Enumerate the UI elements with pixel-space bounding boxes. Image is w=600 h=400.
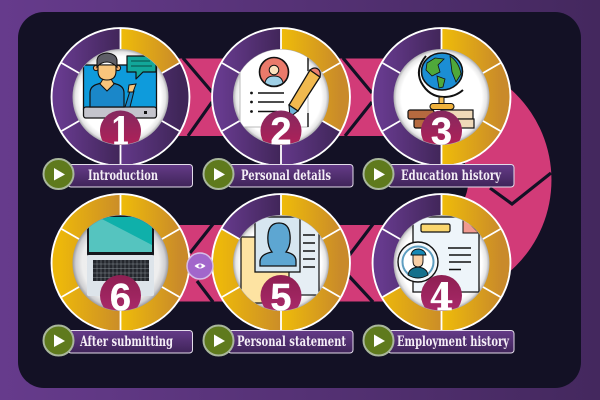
step 6: After submitting: [44, 194, 192, 356]
play button: [44, 159, 74, 189]
ring 6: [52, 194, 189, 332]
step 3: Education history: [364, 28, 514, 189]
label text: Personal statement: [237, 334, 346, 350]
ring 5: [212, 194, 350, 332]
number 4: 4: [430, 275, 454, 319]
ring 4: [373, 194, 510, 332]
label pill: Employment history: [388, 330, 514, 353]
label text: Education history: [401, 168, 502, 184]
icon: video presenter on monitor: [84, 53, 156, 152]
icon: employee record with magnifier: [398, 217, 479, 316]
play button: [44, 326, 74, 356]
label pill: Personal statement: [228, 330, 353, 353]
icon: globe on books: [408, 53, 474, 152]
number badge 6: [100, 275, 141, 310]
step 5: Personal statement: [204, 194, 353, 356]
play button: [204, 326, 234, 356]
label pill: Introduction: [68, 164, 192, 187]
label pill: Education history: [388, 164, 514, 187]
icon: eye badge: [187, 253, 213, 279]
number 1: 1: [110, 109, 130, 153]
number badge 3: [421, 110, 462, 144]
play button: [204, 159, 234, 189]
number 2: 2: [270, 111, 292, 153]
number badge 5: [260, 275, 302, 310]
number 3: 3: [431, 111, 452, 153]
number badge 2: [260, 110, 302, 144]
label pill: After submitting: [68, 330, 192, 353]
ring 2: [212, 28, 350, 166]
ribbon chevron markers: [183, 58, 551, 302]
icon: photo card and documents: [241, 217, 319, 316]
play button: [364, 159, 394, 189]
icon: profile form and pencil: [240, 47, 320, 152]
label text: Personal details: [241, 168, 331, 184]
step 4: Employment history: [364, 194, 514, 356]
pink winding ribbon: [120, 58, 551, 302]
step 1: Introduction: [44, 28, 192, 189]
label pill: Personal details: [228, 164, 353, 187]
icon: laptop: [87, 215, 154, 316]
label text: Employment history: [397, 334, 510, 350]
ring 3: [373, 28, 510, 166]
label text: Introduction: [88, 168, 158, 184]
number 5: 5: [270, 277, 292, 319]
label text: After submitting: [79, 334, 173, 350]
ring 1: [52, 28, 189, 166]
step 2: Personal details: [204, 28, 353, 189]
number 6: 6: [110, 277, 131, 319]
number badge 4: [421, 275, 462, 310]
play button: [364, 326, 394, 356]
number badge 1: [100, 110, 141, 144]
